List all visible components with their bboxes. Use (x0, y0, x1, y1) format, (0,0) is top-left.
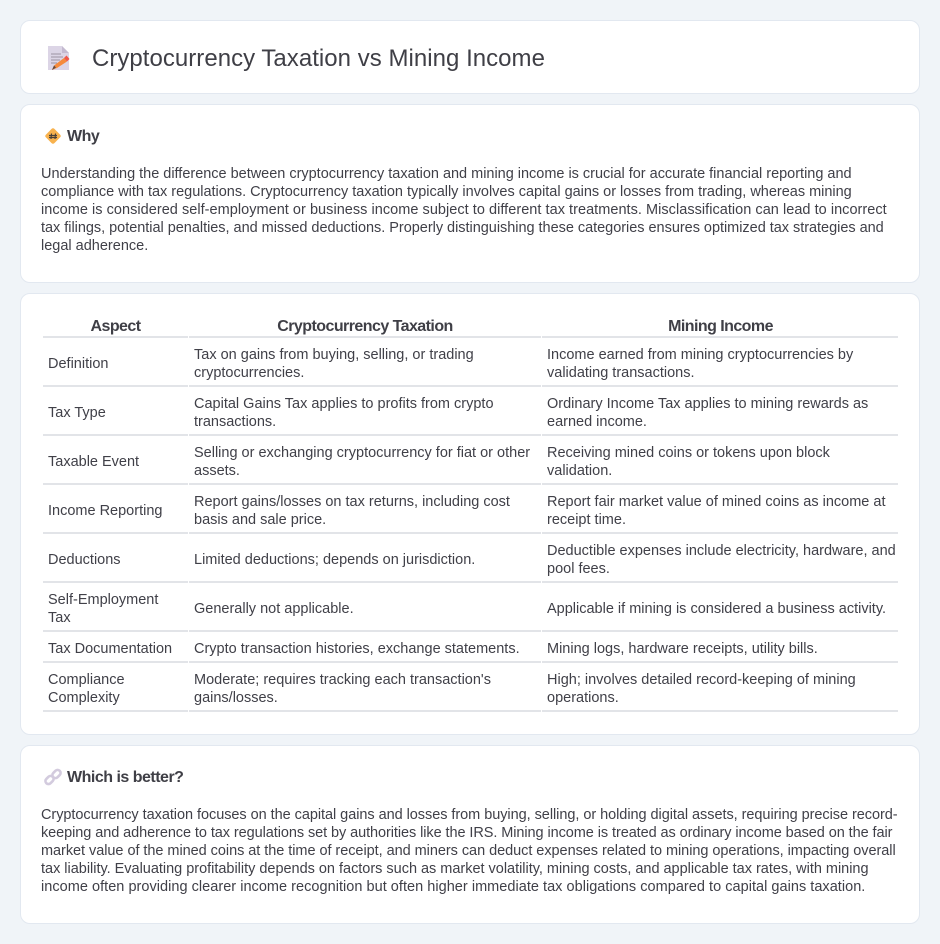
row: deductions (48, 543, 896, 577)
heading: which is better: Which is better? (67, 769, 183, 786)
table header: Mining Income (668, 318, 773, 335)
row: compliance complexity: Complexity (48, 690, 120, 706)
row: tax documentation: Crypto transaction histories, exchange statements. (194, 641, 520, 657)
title: Cryptocurrency Taxation vs Mining Income (92, 45, 545, 72)
row: tax type: Tax Type (48, 405, 106, 421)
row: tax type (48, 396, 868, 430)
text block: which is better (41, 807, 898, 895)
row: taxable event: Taxable Event (48, 454, 139, 470)
row: deductions: pool fees. (547, 561, 610, 577)
text block: which is better: tax liability. Evaluating profitability depends on factors such as market volatility, mining costs, and applicable tax rates, with mining (41, 861, 869, 877)
panel: header (20, 20, 920, 94)
row: income reporting: Report fair market value of mined coins as income at (547, 494, 885, 510)
row: compliance complexity: gains/losses. (194, 690, 278, 706)
text block: why: income is considered self-employment or business income subject to different tax treatments. Misclassification can lead to incorrect (41, 202, 887, 218)
row: deductions: Deductible expenses include electricity, hardware, and (547, 543, 896, 559)
text block: which is better: Cryptocurrency taxation focuses on the capital gains and losses from buying, selling, or holding digital assets, requiring precise record- (41, 807, 898, 823)
row: self-employment tax: Applicable if mining is considered a business activity. (547, 601, 886, 617)
row: tax type: transactions. (194, 414, 276, 430)
row: taxable event (48, 445, 830, 479)
row: compliance complexity (48, 672, 856, 706)
row: taxable event: assets. (194, 463, 240, 479)
row: taxable event: Selling or exchanging cryptocurrency for fiat or other (194, 445, 530, 461)
row: income reporting: basis and sale price. (194, 512, 326, 528)
row: self-employment tax: Generally not applicable. (194, 601, 354, 617)
table header: Aspect (90, 318, 141, 335)
icon: warning diamond (45, 128, 61, 144)
text block: why: legal adherence. (41, 238, 148, 254)
row: definition: validating transactions. (547, 365, 694, 381)
row: compliance complexity: High; involves detailed record-keeping of mining (547, 672, 856, 688)
row: self-employment tax: Tax (48, 610, 71, 626)
row: income reporting: receipt time. (547, 512, 626, 528)
text block: which is better: market value of the mined coins at the time of receipt, and miners can deduct expenses related to mining operations, impacting overall (41, 843, 896, 859)
panel: comparison table (20, 293, 920, 735)
row: definition: Definition (48, 356, 108, 372)
row: tax documentation (48, 641, 818, 657)
row: taxable event: validation. (547, 463, 612, 479)
row: self-employment tax (48, 592, 886, 626)
icon: document with pencil (48, 46, 70, 70)
table header (90, 318, 773, 335)
text block: which is better: keeping and adherence to tax regulations set by authorities like the IRS. Mining income is treated as ordinary income based on the fair (41, 825, 892, 841)
text block: why: compliance with tax regulations. Cryptocurrency taxation typically involves capital gains or losses from trading, whereas mining (41, 184, 852, 200)
icon: chain link (44, 768, 62, 786)
heading: why: Why (67, 128, 99, 145)
row: definition: Tax on gains from buying, selling, or trading (194, 347, 474, 363)
row: tax type: Ordinary Income Tax applies to mining rewards as (547, 396, 868, 412)
panel: why (20, 104, 920, 283)
row: income reporting: Report gains/losses on tax returns, including cost (194, 494, 510, 510)
row: deductions: Limited deductions; depends on jurisdiction. (194, 552, 475, 568)
row: tax documentation: Tax Documentation (48, 641, 172, 657)
row: income reporting: Income Reporting (48, 503, 162, 519)
row: tax type: Capital Gains Tax applies to profits from crypto (194, 396, 494, 412)
row: deductions: Deductions (48, 552, 121, 568)
panel: which is better (20, 745, 920, 924)
row: taxable event: Receiving mined coins or tokens upon block (547, 445, 830, 461)
row: tax documentation: Mining logs, hardware receipts, utility bills. (547, 641, 818, 657)
row: self-employment tax: Self-Employment (48, 592, 158, 608)
table header: Cryptocurrency Taxation (277, 318, 453, 335)
text block: why: tax filings, potential penalties, and missed deductions. Properly distinguishing these categories ensures optimized tax strategies and (41, 220, 884, 236)
text block: why (41, 166, 887, 254)
row: definition (48, 347, 854, 381)
row: tax type: earned income. (547, 414, 647, 430)
row: compliance complexity: operations. (547, 690, 619, 706)
row: income reporting (48, 494, 886, 528)
row: definition: cryptocurrencies. (194, 365, 304, 381)
row: definition: Income earned from mining cryptocurrencies by (547, 347, 853, 363)
text block: why: Understanding the difference between cryptocurrency taxation and mining income is crucial for accurate financial reporting and (41, 166, 852, 182)
row: compliance complexity: Compliance (48, 672, 125, 688)
text block: which is better: income often providing clearer income recognition but often higher immediate tax obligations compared to capital gains taxation. (41, 879, 865, 895)
row: compliance complexity: Moderate; requires tracking each transaction's (194, 672, 491, 688)
